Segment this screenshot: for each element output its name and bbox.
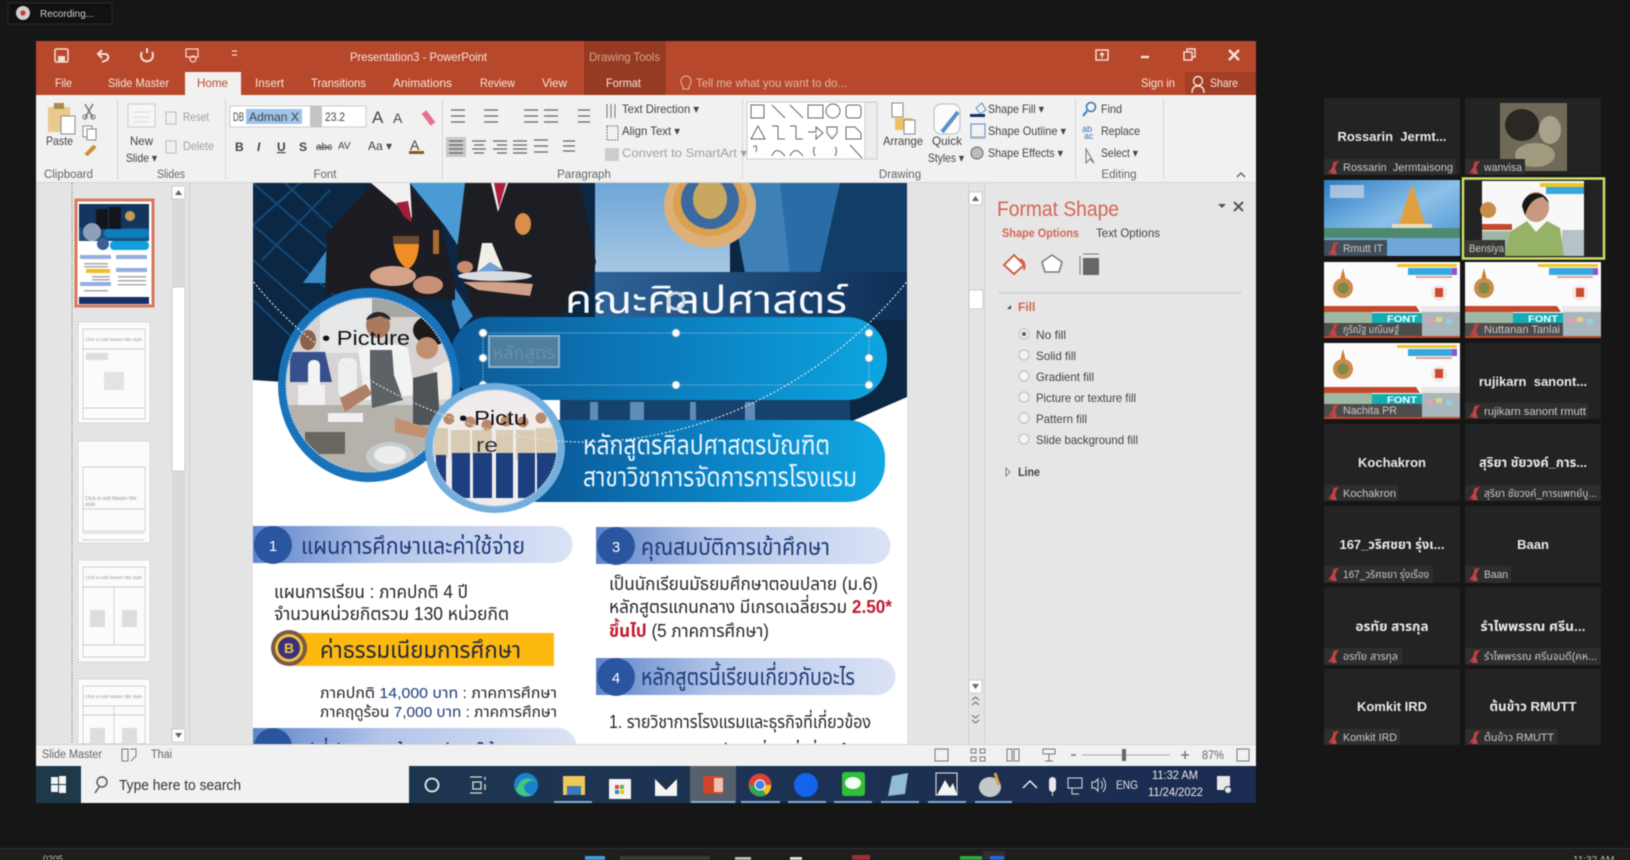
arrange and quick styles (879, 103, 964, 181)
section 4 heading: หลักสูตรนี้เรียนเกี่ยวกับอะไร (641, 661, 855, 692)
editing group: ab (1082, 124, 1092, 134)
tile: Rossarin: Rossarin Jermtaisong (1343, 162, 1453, 174)
shape gallery (747, 102, 877, 159)
format shape panel: Fill (1018, 300, 1035, 314)
font group: A (393, 110, 403, 126)
tile: Komkit IRD (1324, 669, 1460, 745)
university logo (664, 182, 757, 248)
tile: Komkit IRD: Komkit IRD (1343, 732, 1397, 744)
tile: Nuttanan Tanlai (1465, 262, 1601, 338)
section 2 heading (cut off) (252, 727, 576, 745)
font group: B (235, 140, 244, 154)
section 3 heading: 3 (612, 539, 620, 556)
clipboard group: Clipboard (44, 169, 93, 181)
arrange and quick styles: Drawing (879, 169, 921, 181)
tile: thai name with slide (1324, 262, 1460, 338)
shape fill outline effects (970, 102, 1066, 160)
title bar (36, 41, 1256, 95)
arrange and quick styles: Quick (932, 134, 963, 148)
title bar: Presentation3 - PowerPoint (350, 50, 488, 64)
tile: Rampaipan (1465, 587, 1601, 665)
tile: Rossarin: Rossarin Jermt... (1337, 129, 1447, 144)
section 1 heading: 1 (269, 538, 277, 555)
layout thumbnail 3: Click to edit Master title (85, 496, 137, 502)
fill options: Picture or texture fill (1036, 391, 1136, 405)
slides group: New (130, 134, 153, 148)
tile: 167: 167_วริศชยา รุ่งเรือง (1343, 568, 1429, 581)
tile: Baan: Baan (1484, 569, 1508, 581)
editing group: Find (1101, 102, 1122, 116)
fill options: Slide background fill (1036, 433, 1138, 447)
format shape panel: Format Shape (997, 198, 1119, 221)
study plan text (274, 582, 509, 624)
font group: Font (313, 169, 337, 181)
format shape panel (984, 183, 1256, 745)
tile: Rossarin (1324, 98, 1460, 175)
clipboard group: Paste (46, 134, 73, 148)
tile: Bensiya active speaker (1463, 178, 1604, 258)
tile: Baan: Baan (1517, 537, 1549, 552)
fill options: Solid fill (1036, 349, 1076, 363)
tile: wanvisa: wanvisa (1483, 162, 1523, 174)
tile: 167: 167_วริศชยา รุ่งเ... (1340, 537, 1444, 552)
fee details: ภาคปกติ 14,000 บาท : ภาคการศึกษา (320, 685, 557, 702)
tile: Tonkhao RMUTT (1465, 669, 1601, 745)
tile: rujikarn (1465, 343, 1601, 419)
font group: DB (233, 110, 244, 124)
paragraph group: Convert to SmartArt ▾ (622, 146, 747, 160)
tile: Rampaipan: รำไพพรรณ ศรีน... (1480, 619, 1586, 634)
font group: A (410, 137, 420, 153)
admission text: ขึ้นไป (5 ภาคการศึกษา) (609, 618, 769, 641)
fill options: Pattern fill (1036, 412, 1087, 426)
layout thumbnail 3 (78, 441, 150, 543)
tile: Nachita PR (1324, 343, 1460, 419)
ribbon tabs: Insert (255, 76, 285, 90)
font group: U (277, 140, 286, 154)
shape fill outline effects: Shape Fill ▾ (988, 102, 1044, 116)
tile: Tonkhao RMUTT: ต้นข้าว RMUTT (1490, 699, 1577, 714)
circle photo 2: hospitality students: • Pictu (459, 408, 527, 430)
tile: Nuttanan Tanlai: FONT (1528, 314, 1558, 325)
tile: thai name with slide: FONT (1387, 314, 1417, 325)
ribbon tabs: File (55, 76, 72, 90)
PowerPoint window (36, 41, 1256, 803)
program pill: หลักสูตรศิลปศาสตรบัณฑิต (583, 430, 830, 461)
clipboard group (44, 103, 96, 181)
selected slide thumbnail (76, 200, 153, 306)
system tray: 11/24/2022 (1148, 785, 1203, 799)
fee details (320, 685, 557, 721)
tile: Orathai: อรทัย สารกุล (1356, 619, 1428, 634)
font group: abc (316, 142, 332, 153)
system tray: 11:32 AM (1152, 768, 1198, 782)
tile: rujikarn: rujikarn sanont rmutt (1484, 406, 1586, 418)
fill options (1019, 328, 1138, 447)
tile: 167 (1324, 506, 1460, 583)
section 1 heading: แผนการศึกษาและค่าใช้จ่าย (301, 533, 525, 559)
fill options: Gradient fill (1036, 370, 1094, 384)
layout thumbnail 3: style (85, 502, 96, 508)
ribbon tabs (55, 72, 1238, 95)
tile: Kochakron (1324, 424, 1460, 501)
slides group: Slide ▾ (126, 151, 157, 165)
paragraph group (446, 102, 747, 181)
circle photo 2: hospitality students: re (476, 435, 498, 457)
admission text (609, 574, 892, 641)
paragraph group: Paragraph (557, 169, 611, 181)
tile: rujikarn: rujikarn sanont... (1479, 374, 1587, 389)
editing group (1082, 102, 1245, 181)
recording indicator (8, 3, 112, 24)
tile: Suriya (1465, 424, 1601, 501)
font group (230, 106, 433, 181)
tile: Kochakron: Kochakron (1358, 455, 1426, 470)
font group: Aa ▾ (368, 139, 392, 153)
arrange and quick styles: Styles ▾ (928, 151, 964, 165)
ribbon tabs: Animations (393, 76, 452, 90)
section 3 heading: คุณสมบัติการเข้าศึกษา (641, 534, 830, 561)
ribbon tabs: Home (197, 76, 228, 90)
format shape panel: Shape Options (1002, 226, 1079, 240)
ribbon tabs: Share (1210, 76, 1238, 90)
font group: AV (338, 141, 351, 152)
faculty title: คณะศิลปศาสตร์ (565, 280, 848, 322)
editing group: Editing (1101, 169, 1137, 181)
ribbon tabs: Sign in (1141, 76, 1175, 90)
tile: thai name with slide: ภูริณัฐ มณีนษฐ์ (1343, 324, 1399, 336)
admission text: หลักสูตรแกนกลาง มีเกรดเฉลี่ยรวม 2.50* (609, 594, 892, 619)
slides group: Delete (183, 139, 214, 153)
tile: Orathai (1324, 587, 1460, 665)
tile: Rmutt IT: Rmutt IT (1343, 243, 1383, 255)
layout thumbnail 2 (78, 322, 150, 423)
shape fill outline effects: Shape Outline ▾ (988, 124, 1066, 138)
system tray: ENG (1116, 778, 1138, 792)
format shape panel: Line (1018, 465, 1040, 479)
tile: Suriya: สุริยา ชัยวงค์_การ... (1479, 455, 1587, 470)
fee details: ภาคฤดูร้อน 7,000 บาท : ภาคการศึกษา (320, 704, 557, 721)
paragraph group: Align Text ▾ (622, 124, 680, 138)
section 4 heading (596, 658, 896, 696)
tile: Nachita PR: FONT (1387, 395, 1417, 406)
editing group: ac (1084, 131, 1094, 141)
editing group: Select ▾ (1101, 146, 1138, 160)
tuition fee banner: B (284, 640, 294, 656)
bottom host taskbar strip (0, 848, 1630, 860)
tile: Komkit IRD: Komkit IRD (1357, 699, 1427, 714)
circle photo 2: hospitality students (425, 383, 565, 513)
staff photo: two people in suits (325, 183, 596, 316)
status bar (36, 744, 1256, 766)
slide vertical scrollbar (968, 183, 983, 745)
tile: Orathai: อรทัย สารกุล (1343, 651, 1398, 663)
ribbon tabs: Tell me what you want to do... (696, 76, 847, 90)
ribbon tabs: Slide Master (108, 76, 169, 90)
section 3 heading (596, 527, 890, 565)
search box (81, 766, 409, 803)
thumbnail pane (36, 183, 190, 745)
arrange and quick styles: Arrange (883, 134, 923, 148)
selection handles (479, 293, 873, 389)
layout thumbnail 2: Click to edit Master title style (85, 337, 143, 342)
header photo background (253, 183, 907, 422)
layout thumbnail 5 (78, 679, 150, 744)
course list: 1. รายวิชาการโรงแรมและธุรกิจที่เกี่ยวข้อง (609, 709, 871, 733)
tile: Bensiya active speaker: Bensiya (1469, 243, 1505, 255)
ribbon tabs: Format (606, 76, 642, 90)
window frame (36, 41, 1256, 766)
circle photo 1: kitchen class: • Picture (322, 328, 410, 350)
tile: Rampaipan: รำไพพรรณ ศรีนจมดี(คห... (1484, 651, 1597, 663)
slides group: Slides (157, 169, 185, 181)
recording indicator: Recording... (40, 8, 94, 20)
slide canvas (253, 162, 907, 766)
tile: Baan (1465, 506, 1601, 583)
font group: I (257, 140, 261, 154)
course list (610, 709, 871, 745)
running app underlines (554, 801, 1012, 803)
ribbon tabs: Review (480, 76, 515, 90)
font group: S (299, 140, 307, 154)
section 2 heading (cut off): มีที่พักและห้องเรียนให้ (301, 737, 497, 766)
ribbon (36, 95, 1256, 183)
slides group: Reset (183, 110, 210, 124)
font group: 23.2 (325, 110, 345, 124)
section 4 heading: 4 (612, 670, 620, 687)
font group: A (372, 108, 384, 127)
layout thumbnail 4 (78, 560, 150, 662)
save icon (55, 49, 68, 62)
paragraph group: Text Direction ▾ (622, 102, 699, 116)
tile: Suriya: สุริยา ชัยวงค์_การแพทย์บู... (1484, 488, 1597, 500)
circle photo 1: kitchen class (278, 285, 460, 485)
search box: Type here to search (119, 777, 241, 794)
course list: 2. รายวิชาการท่องเที่ยวที่เกี่ยวข้อง (609, 739, 871, 762)
layout thumbnail 4: Click to edit Master title style (85, 575, 143, 580)
system tray (1023, 768, 1232, 799)
window controls (1096, 49, 1239, 60)
dashed shape outline arc (203, 183, 964, 442)
selected placeholder text: หลักสูตร (493, 343, 555, 365)
format shape panel: Text Options (1096, 226, 1160, 240)
tile: wanvisa (1465, 98, 1601, 175)
slides group (126, 104, 214, 181)
tile: Tonkhao RMUTT: ต้นข้าว RMUTT (1484, 732, 1554, 744)
start button (51, 776, 66, 793)
study plan text: จำนวนหน่วยกิตรวม 130 หน่วยกิต (274, 604, 509, 624)
ribbon tabs: View (542, 76, 567, 90)
tile: Kochakron: Kochakron (1343, 488, 1396, 500)
blue pill with selected text box (450, 293, 887, 400)
tuition fee banner (271, 630, 554, 666)
fill, effects and size tabs (1004, 254, 1099, 275)
status bar: 87% (1202, 750, 1224, 762)
windows taskbar (36, 766, 1256, 803)
program pill: สาขาวิชาการจัดการการโรงแรม (583, 462, 857, 492)
study plan text: แผนการเรียน : ภาคปกติ 4 ปี (274, 582, 468, 602)
participant grid (1324, 98, 1604, 745)
tile: Nuttanan Tanlai: Nuttanan Tanlai (1484, 324, 1560, 336)
ribbon tabs: Transitions (311, 76, 366, 90)
fill options: No fill (1036, 328, 1066, 342)
selected placeholder text (489, 336, 559, 367)
font group: Adman X (249, 110, 299, 124)
status bar: Thai (151, 749, 172, 761)
shape fill outline effects: Shape Effects ▾ (988, 146, 1063, 160)
editing group: Replace (1101, 124, 1140, 138)
admission text: เป็นนักเรียนมัธยมศึกษาตอนปลาย (ม.6) (609, 574, 878, 594)
tuition fee banner: ค่าธรรมเนียมการศึกษา (320, 637, 521, 663)
status bar: Slide Master (42, 749, 102, 761)
program pill (500, 420, 885, 502)
tile: Nachita PR: Nachita PR (1343, 405, 1397, 417)
title bar: Drawing Tools (589, 50, 660, 64)
pane scrollbar (172, 186, 185, 742)
tile: Rmutt IT (1324, 180, 1460, 256)
taskbar app icons (426, 766, 1001, 803)
layout thumbnail 5: Click to edit Master title style (85, 694, 143, 699)
undo redo icons (98, 48, 237, 62)
section 1 heading (253, 526, 572, 564)
